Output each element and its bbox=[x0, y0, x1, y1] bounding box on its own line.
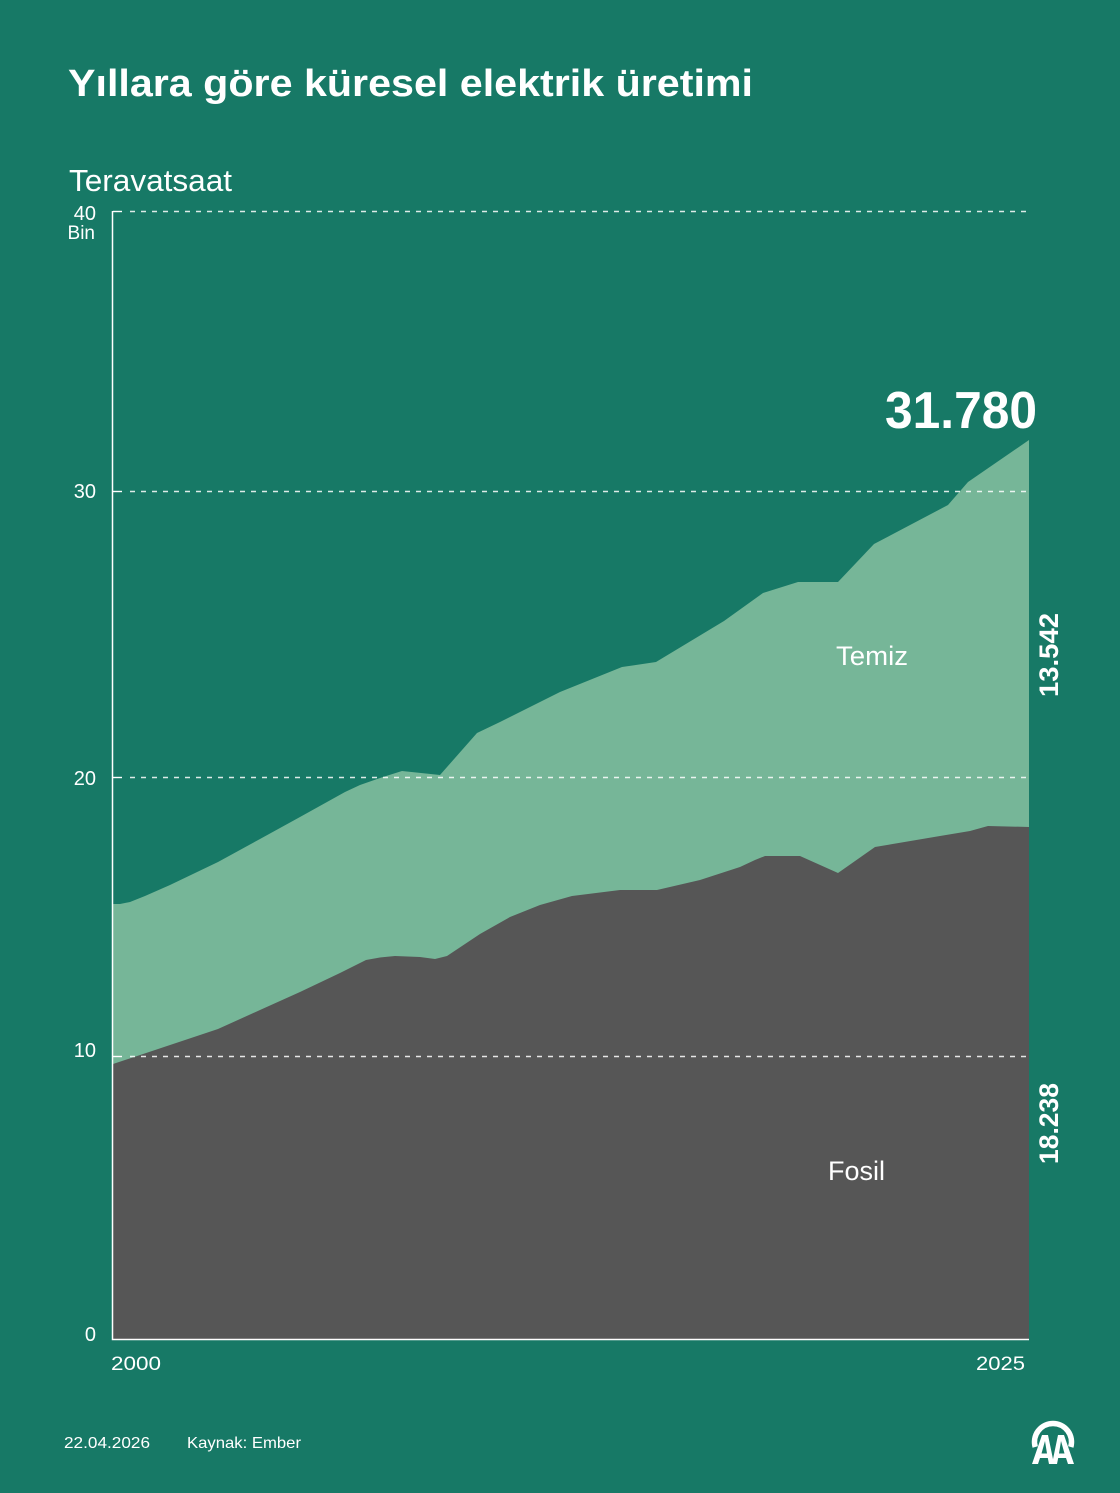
icon: AA logo bbox=[1032, 1423, 1074, 1464]
footer date: 22.04.2026 bbox=[64, 1435, 150, 1452]
x axis labels: 2025 bbox=[976, 1354, 1025, 1375]
series label: clean: Temiz bbox=[836, 641, 908, 671]
fossil value: 18.238 bbox=[1034, 1083, 1064, 1164]
total value callout: 31.780 bbox=[885, 382, 1037, 440]
y axis labels: Bin bbox=[68, 223, 95, 244]
y axis labels: 40 bbox=[74, 203, 96, 225]
area: clean generation bbox=[113, 440, 1029, 1065]
gridlines bbox=[113, 212, 1029, 1056]
unit label: Teravatsaat bbox=[69, 163, 232, 198]
area: fossil generation bbox=[113, 826, 1029, 1339]
y axis labels: 0 bbox=[85, 1324, 96, 1346]
chart: stacked area bbox=[112, 211, 1029, 1340]
x axis labels: 2000 bbox=[111, 1354, 161, 1375]
axes bbox=[112, 211, 1029, 1340]
y axis labels: 30 bbox=[74, 481, 96, 503]
y axis labels: 20 bbox=[74, 768, 96, 790]
title: Yıllara göre küresel elektrik üretimi bbox=[68, 63, 753, 105]
clean value: 13.542 bbox=[1034, 613, 1064, 697]
footer source: Kaynak: Ember bbox=[187, 1435, 302, 1452]
x axis labels bbox=[111, 1354, 1025, 1375]
y axis labels bbox=[68, 203, 96, 1346]
y axis labels: 10 bbox=[74, 1040, 96, 1062]
series label: fossil: Fosil bbox=[828, 1156, 885, 1186]
